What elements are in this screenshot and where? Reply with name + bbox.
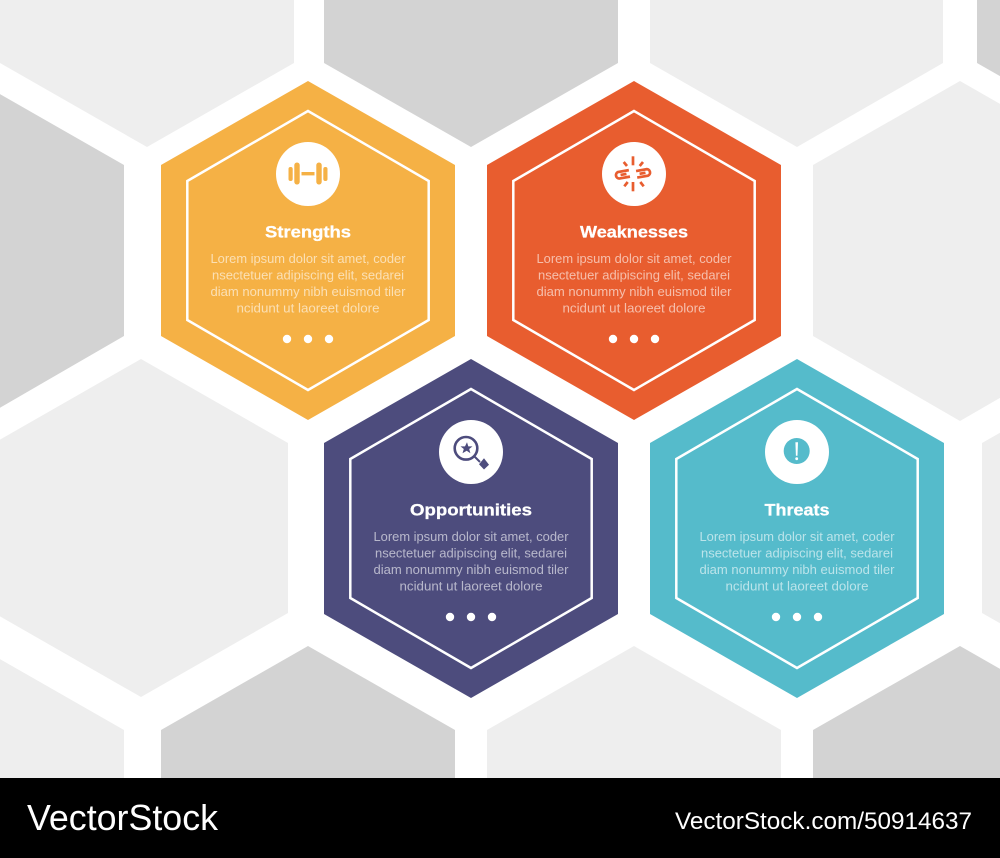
three dots xyxy=(283,335,333,343)
body text xyxy=(374,529,569,594)
icon: magnifier with star xyxy=(439,420,503,484)
body text: diam nonummy nibh euismod tiler xyxy=(700,562,895,577)
body text xyxy=(700,529,895,594)
icon: exclamation mark xyxy=(765,420,829,484)
hexagon inner outline xyxy=(350,389,592,668)
body text: Lorem ipsum dolor sit amet, coder xyxy=(700,529,895,544)
body text: Lorem ipsum dolor sit amet, coder xyxy=(536,251,732,266)
panel: Threats xyxy=(650,359,944,698)
body text: Lorem ipsum dolor sit amet, coder xyxy=(210,251,406,266)
heading: Weaknesses xyxy=(580,222,688,242)
footer logo text: VectorStock xyxy=(27,797,219,838)
body text: diam nonummy nibh euismod tiler xyxy=(210,284,406,299)
footer bar xyxy=(0,778,1000,858)
footer URL text: VectorStock.com/50914637 xyxy=(675,808,972,835)
body text: ncidunt ut laoreet dolore xyxy=(236,300,380,316)
panel: Weaknesses xyxy=(487,81,781,420)
hexagon inner outline xyxy=(676,389,918,668)
body text: diam nonummy nibh euismod tiler xyxy=(536,284,732,299)
body text: Lorem ipsum dolor sit amet, coder xyxy=(374,529,569,544)
body text: nsectetuer adipiscing elit, sedarei xyxy=(375,546,567,560)
body text: nsectetuer adipiscing elit, sedarei xyxy=(212,268,404,282)
icon: broken chain xyxy=(602,142,666,206)
heading: Threats xyxy=(764,500,830,520)
body text: nsectetuer adipiscing elit, sedarei xyxy=(538,268,730,282)
hexagon inner outline xyxy=(187,111,429,390)
heading: Opportunities xyxy=(410,500,532,520)
heading: Strengths xyxy=(265,222,351,242)
icon: dumbbell xyxy=(276,142,340,206)
body text: ncidunt ut laoreet dolore xyxy=(562,300,706,316)
three dots xyxy=(772,613,822,621)
body text xyxy=(210,251,406,316)
body text: ncidunt ut laoreet dolore xyxy=(400,578,542,594)
hexagon background xyxy=(650,359,944,698)
body text: diam nonummy nibh euismod tiler xyxy=(374,562,569,577)
body text: ncidunt ut laoreet dolore xyxy=(726,578,868,594)
hexagon background xyxy=(487,81,781,420)
three dots xyxy=(609,335,659,343)
hexagon inner outline xyxy=(513,111,755,390)
body text xyxy=(536,251,732,316)
three dots xyxy=(446,613,496,621)
panel: Strengths xyxy=(161,81,455,420)
hexagon background xyxy=(161,81,455,420)
body text: nsectetuer adipiscing elit, sedarei xyxy=(701,546,893,560)
panel: Opportunities xyxy=(324,359,618,698)
hexagon background xyxy=(324,359,618,698)
